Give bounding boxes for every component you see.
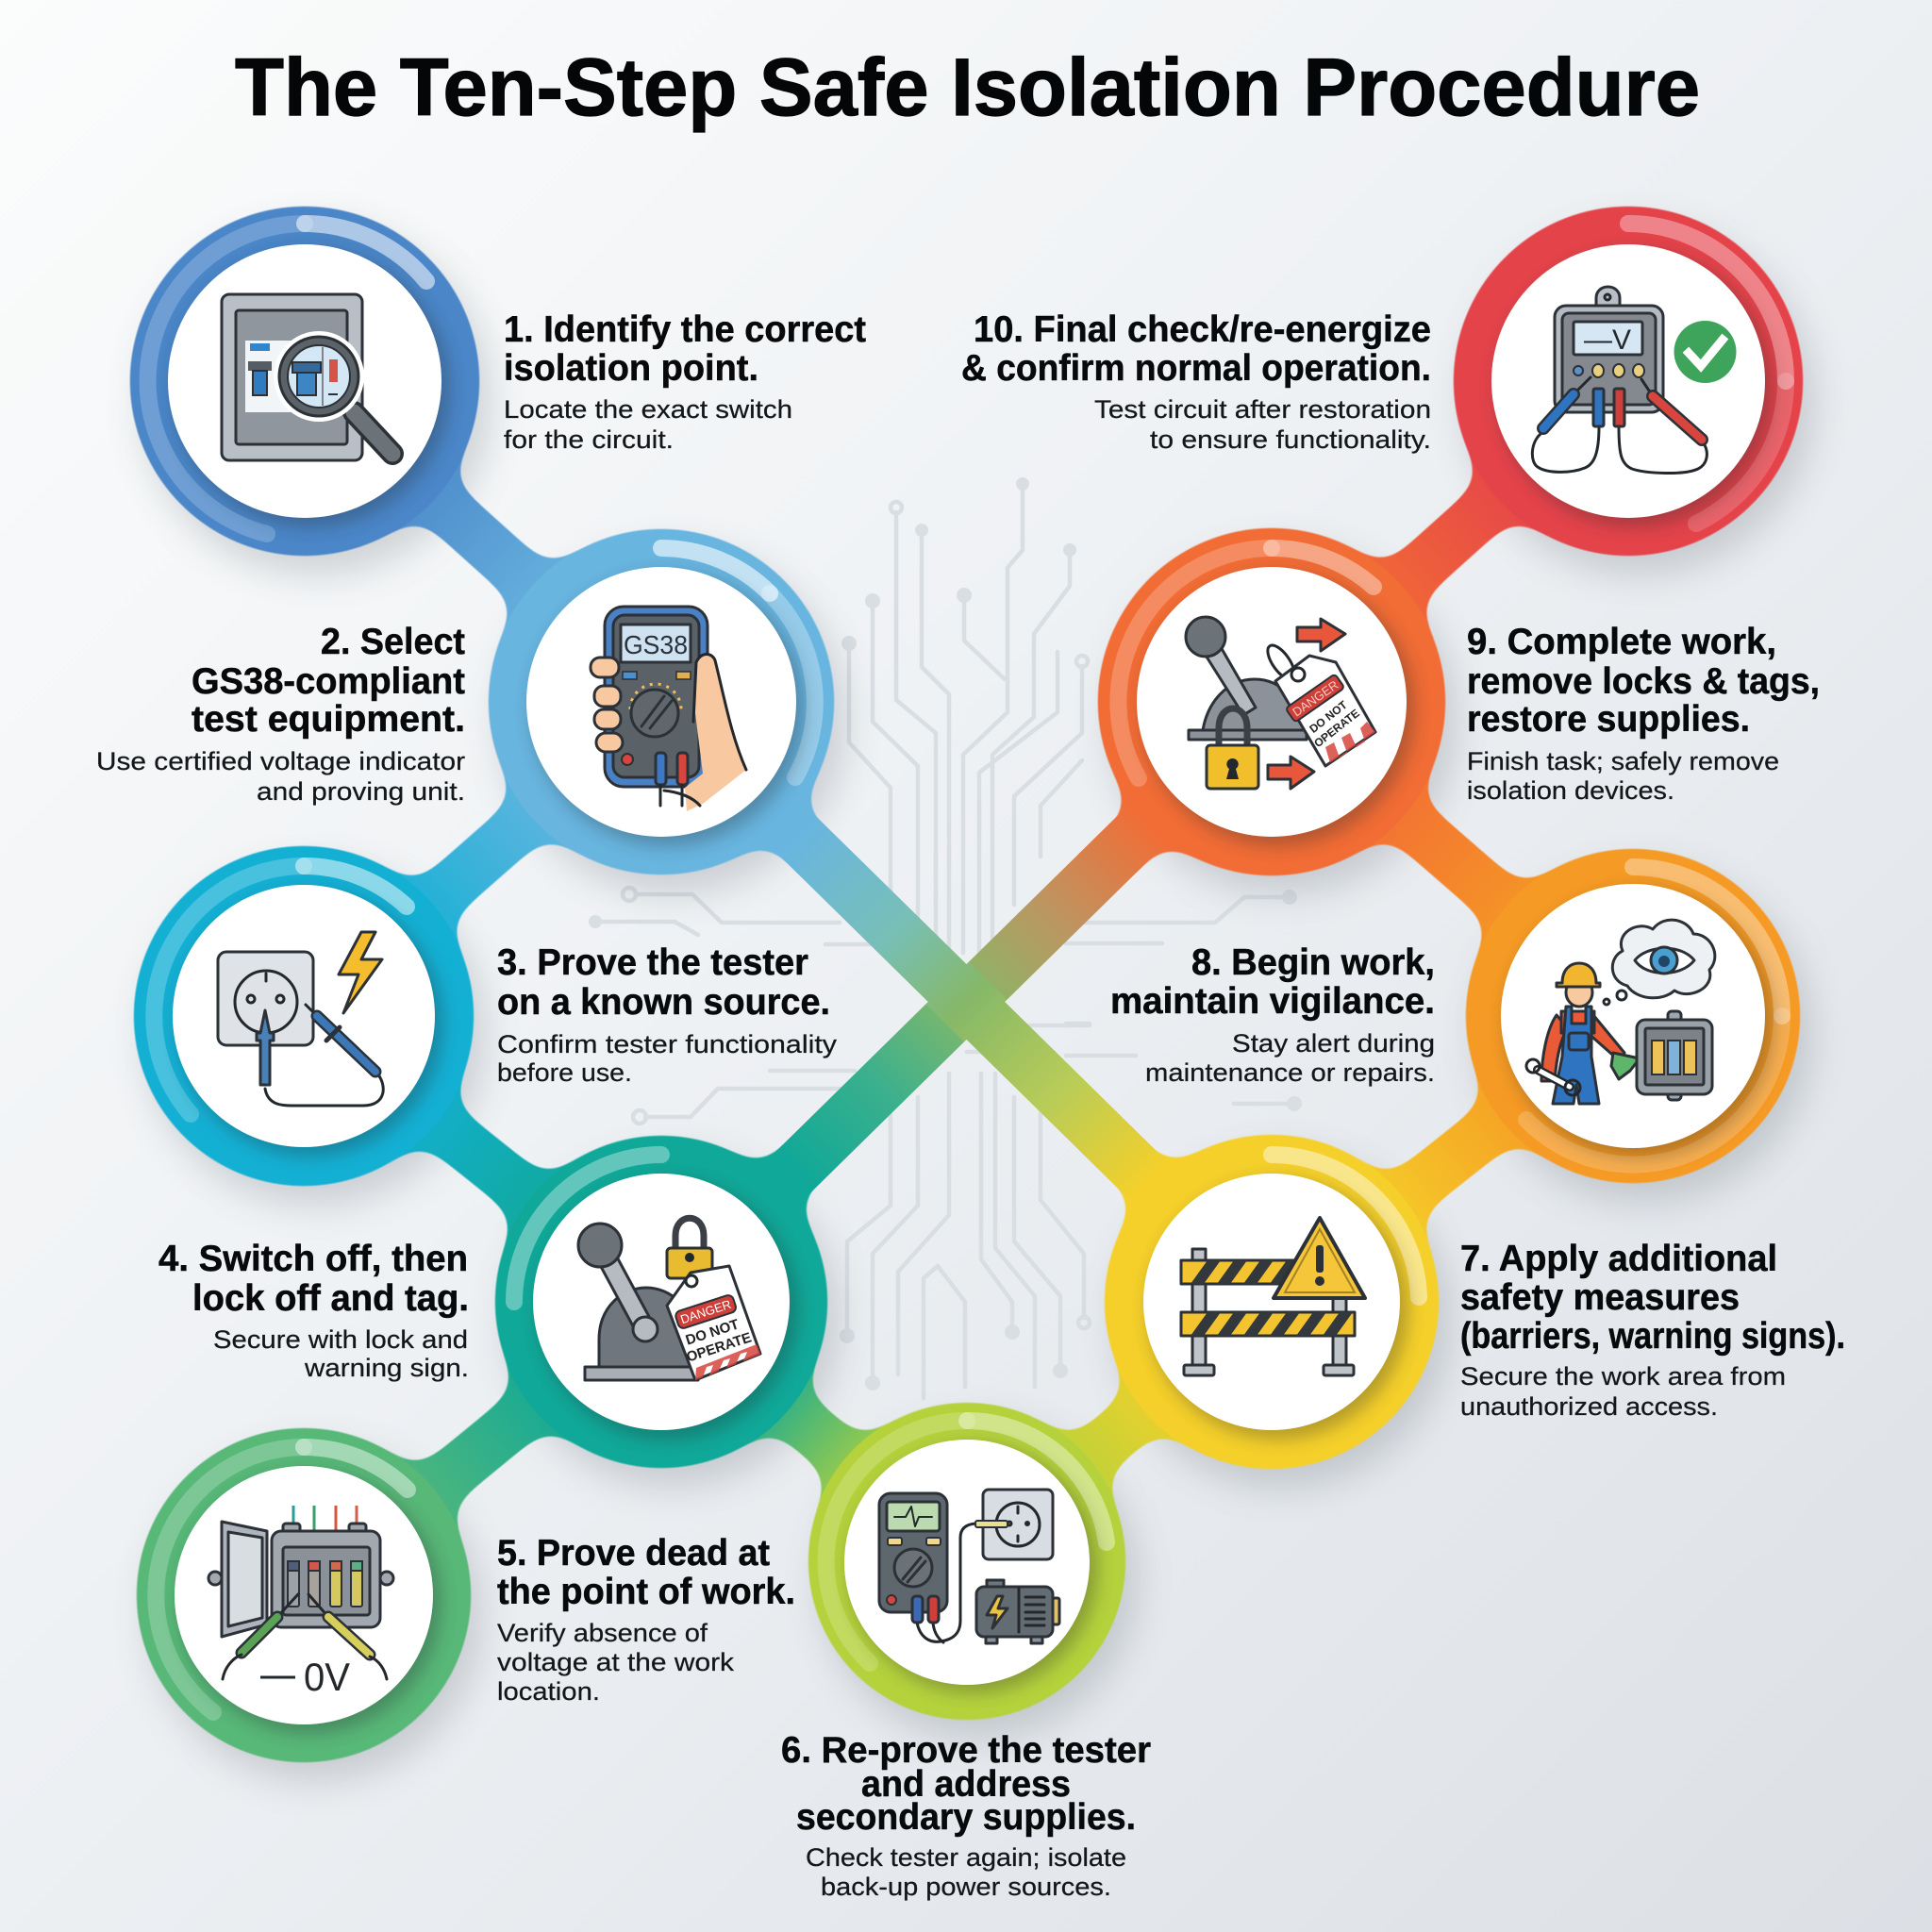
- text: step 6: 6. Re-prove the tester: [781, 1730, 1151, 1771]
- icon: lever with lock and danger tag: DO NOT: [684, 1316, 741, 1349]
- text: step 4: warning sign.: [304, 1354, 469, 1382]
- text: step 9: 9. Complete work,: [1467, 622, 1776, 662]
- text: step 9: remove locks & tags,: [1467, 661, 1820, 702]
- ring fills: [129, 206, 1804, 1763]
- connector gradients: [379, 444, 1556, 1542]
- text: step 5: voltage at the work: [497, 1648, 735, 1676]
- text: step 7: (barriers, warning signs).: [1460, 1316, 1845, 1357]
- text: step 7: [1460, 1239, 1845, 1421]
- icon: lever, padlock, tag and arrows: DO NOT: [1307, 698, 1350, 736]
- text: step 5: [497, 1533, 795, 1706]
- icon: tester with check mark: [1532, 287, 1736, 474]
- icon: lever with lock and danger tag: [578, 1218, 760, 1380]
- network drop shadow: [142, 225, 1814, 1781]
- text: step 2: [96, 622, 465, 806]
- text: step 8: [1110, 942, 1435, 1087]
- text: step 1: [504, 309, 866, 454]
- icon: lever with lock and danger tag: DANGER: [678, 1297, 733, 1326]
- text: step 7: Secure the work area from: [1460, 1362, 1786, 1391]
- white discs: [168, 244, 1765, 1724]
- ring highlights: [148, 224, 1786, 1712]
- icon: worker thinking of vigilance eye: [1526, 920, 1715, 1104]
- text: step 3: [497, 942, 838, 1087]
- text: step 8: 8. Begin work,: [1191, 942, 1435, 983]
- text: step 3: on a known source.: [497, 982, 830, 1023]
- text: step 10: to ensure functionality.: [1150, 425, 1431, 454]
- text: step 3: Confirm tester functionality: [497, 1030, 838, 1058]
- text: step 9: isolation devices.: [1467, 776, 1674, 805]
- icon: socket with probe and lightning: [218, 932, 383, 1106]
- text: step 5: the point of work.: [497, 1572, 795, 1612]
- text: step 5: 5. Prove dead at: [497, 1533, 770, 1574]
- text: step 10: 10. Final check/re-energize: [974, 309, 1431, 350]
- text: step 3: before use.: [497, 1058, 632, 1087]
- icon: open junction box with probes reading 0V: [208, 1506, 393, 1699]
- text: step 10: Test circuit after restoration: [1094, 395, 1431, 424]
- circuit board traces: [589, 477, 1302, 1398]
- icon: lever, padlock, tag and arrows: [1186, 617, 1375, 789]
- text: step 8: maintain vigilance.: [1110, 981, 1435, 1022]
- connected ring network: [129, 206, 1804, 1763]
- text: step 9: restore supplies.: [1467, 699, 1750, 740]
- text: step 10: [961, 309, 1431, 454]
- text: step 6: back-up power sources.: [821, 1873, 1111, 1901]
- text: step 4: 4. Switch off, then: [158, 1239, 468, 1279]
- text: step 1: isolation point.: [504, 348, 758, 389]
- icon: lever with lock and danger tag: OPERATE: [685, 1329, 754, 1366]
- icon: lever, padlock, tag and arrows: OPERATE: [1311, 707, 1362, 750]
- icon: barrier with warning triangle: [1181, 1218, 1365, 1375]
- text: step 3: 3. Prove the tester: [497, 942, 808, 983]
- text: step 6: [781, 1730, 1151, 1901]
- text: step 4: lock off and tag.: [192, 1278, 469, 1319]
- text: step 7: unauthorized access.: [1460, 1392, 1718, 1421]
- icon: tester with check mark: —V: [1584, 325, 1631, 356]
- icon: open junction box with probes reading 0V: 0V: [304, 1655, 350, 1699]
- text: step 5: location.: [497, 1677, 600, 1706]
- text: step 6: secondary supplies.: [796, 1797, 1136, 1838]
- text: step 6: and address: [861, 1764, 1071, 1805]
- text: step 2: Use certified voltage indicator: [96, 747, 465, 775]
- text: step 9: Finish task; safely remove: [1467, 747, 1779, 775]
- text: step 4: Secure with lock and: [213, 1325, 468, 1354]
- text: step 2: and proving unit.: [257, 777, 465, 806]
- icon: GS38 multimeter in hand: GS38: [624, 630, 688, 659]
- icon: lever, padlock, tag and arrows: DANGER: [1290, 677, 1341, 720]
- text: step 1: 1. Identify the correct: [504, 309, 866, 350]
- text: step 1: Locate the exact switch: [504, 395, 792, 424]
- text: step 2: test equipment.: [192, 699, 465, 740]
- text: step 6: Check tester again; isolate: [806, 1843, 1126, 1872]
- text: step 2: 2. Select: [321, 622, 465, 662]
- text: step 4: [158, 1239, 469, 1382]
- text: step 10: & confirm normal operation.: [961, 348, 1431, 389]
- icon: GS38 multimeter in hand: [591, 607, 746, 811]
- title: The Ten-Step Safe Isolation Procedure: [235, 42, 1700, 133]
- text: step 8: Stay alert during: [1232, 1029, 1435, 1058]
- text: step 1: for the circuit.: [504, 425, 674, 454]
- text: step 2: GS38-compliant: [192, 661, 465, 702]
- text: step 7: 7. Apply additional: [1460, 1239, 1777, 1279]
- text: step 7: safety measures: [1460, 1277, 1740, 1318]
- text: step 5: Verify absence of: [497, 1619, 708, 1647]
- icon: breaker panel with magnifier: [222, 294, 392, 460]
- text: step 9: [1467, 622, 1820, 805]
- text: step 8: maintenance or repairs.: [1145, 1058, 1435, 1087]
- icon: multimeter, socket and generator: [879, 1490, 1059, 1643]
- white disc shadows: [173, 250, 1774, 1734]
